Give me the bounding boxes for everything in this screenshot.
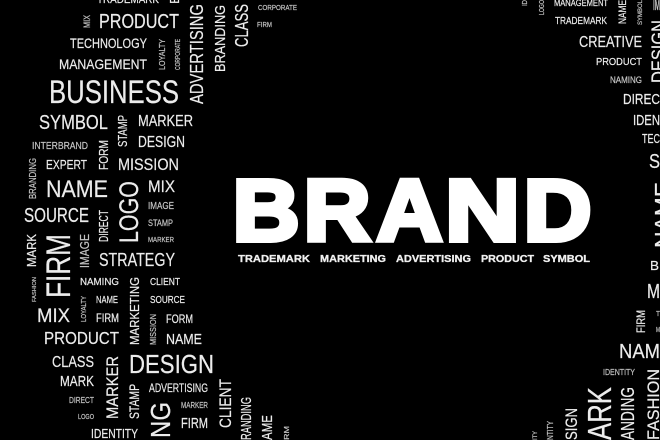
word cloud: left lower block: AME — [260, 415, 276, 440]
word cloud: left upper block: PRODUCT — [99, 11, 179, 33]
heading: BRAND: R — [304, 162, 371, 260]
word cloud: right block: ARK — [581, 387, 618, 440]
tagline: category words — [238, 254, 590, 265]
word cloud: left upper block: LOGO — [114, 181, 144, 243]
word cloud: left upper block — [24, 0, 297, 345]
word cloud: left lower block: RM — [282, 426, 291, 440]
word cloud: right block — [522, 0, 660, 440]
word cloud: left upper block: FASHION — [32, 277, 38, 302]
word cloud: left upper block: CORPORATE — [258, 3, 297, 12]
word cloud: left upper block: DESIGN — [138, 134, 185, 151]
word cloud: left upper block: MISSION — [118, 156, 179, 174]
word cloud: left lower block: MARK — [60, 374, 94, 390]
word cloud: left upper block: IMAGE — [78, 234, 92, 268]
word cloud: right block: FIRM — [636, 310, 648, 333]
tagline: category words: MARKETING — [320, 254, 386, 265]
word cloud: right block: ANDING — [618, 387, 638, 440]
tagline: category words: PRODUCT — [481, 254, 534, 265]
word cloud: left upper block: NAME — [46, 176, 108, 203]
word cloud: right block: PRODUCT — [596, 56, 643, 68]
word cloud: left lower block: RANDING — [239, 397, 255, 440]
word cloud: right block: SIGN — [562, 408, 581, 440]
word cloud: right block: IDENTITY — [603, 367, 635, 377]
word cloud: left lower block: NAME — [166, 332, 202, 348]
word cloud: left lower block: MISSION — [148, 314, 158, 345]
word cloud: left lower block: LOGO — [78, 414, 94, 421]
word cloud: left upper block: MIX — [148, 177, 175, 196]
word cloud: right block: ITY — [533, 431, 539, 440]
heading: BRAND: A — [376, 162, 442, 260]
word cloud: left upper block: MARK — [25, 233, 39, 267]
word cloud: left upper block: IMAGE — [148, 201, 174, 212]
word cloud: right block: NTITY — [545, 421, 555, 440]
heading: BRAND: D — [524, 162, 592, 260]
word cloud: left upper block: FIRM — [40, 234, 78, 298]
word cloud: left lower block: MARKER — [181, 400, 208, 410]
word cloud: left upper block: CORPORATE — [175, 39, 182, 70]
word cloud: left lower block: PRODUCT — [44, 328, 119, 348]
word cloud: left upper block: MANAGEMENT — [59, 56, 147, 72]
word cloud: left upper block: INTERBRAND — [32, 141, 88, 152]
word cloud: left lower block: SOURCE — [150, 295, 185, 306]
heading: BRAND: B — [233, 162, 300, 260]
word cloud: left upper block: MIX — [82, 15, 92, 28]
word cloud: left upper block: FIRM — [257, 20, 272, 29]
word cloud: left upper block: CLIENT — [150, 276, 180, 288]
word cloud: left lower block: FORM — [166, 314, 193, 326]
tagline: category words: SYMBOL — [543, 254, 590, 265]
word cloud: left lower block: ADVERTISING — [149, 383, 208, 395]
word cloud: left lower block: NG — [145, 402, 176, 438]
word cloud: right block: CREATIVE — [579, 34, 642, 51]
word cloud: left upper block: LOYALTY — [157, 39, 167, 70]
word cloud: left upper block: SOURCE — [24, 205, 89, 227]
word cloud: left lower block: FIRM — [96, 313, 119, 325]
word cloud: left upper block: FORM — [97, 140, 111, 170]
word cloud: right block: B — [650, 258, 659, 273]
word cloud: left lower block: FIRM — [181, 416, 208, 432]
word cloud: left upper block: STRATEGY — [99, 249, 175, 270]
word cloud: left lower block: LOYALTY — [79, 296, 88, 322]
word cloud: left lower block: DESIGN — [129, 349, 214, 379]
word cloud: left upper block: NAMING — [80, 276, 119, 288]
word cloud: right block: NAMING — [610, 75, 642, 85]
word cloud: left upper block: STAMP — [116, 115, 130, 147]
word cloud: left lower block: MIX — [37, 306, 70, 327]
word cloud: left lower block: DIRECT — [69, 395, 94, 405]
word cloud: left upper block: TECHNOLOGY — [70, 35, 148, 51]
word cloud: left upper block: BRANDING — [28, 158, 39, 199]
word cloud: left upper block: EXPERT — [46, 157, 87, 172]
word cloud: left lower block: MARKER — [103, 356, 122, 419]
word cloud: left upper block: DIRECT — [97, 210, 111, 242]
heading: BRAND: N — [445, 162, 520, 260]
word cloud: right block: TRADEMARK — [555, 16, 607, 27]
word cloud: left upper block: STAMP — [148, 218, 173, 228]
tagline: category words: TRADEMARK — [238, 254, 311, 265]
word cloud: left lower block: CLIENT — [216, 379, 235, 428]
tagline: category words: ADVERTISING — [396, 254, 471, 265]
word cloud: left upper block: MARKETING — [127, 277, 142, 345]
word cloud: left lower block — [37, 295, 291, 440]
word cloud: left upper block: BUSINESS — [49, 74, 179, 110]
word cloud: left lower block: CLASS — [52, 354, 94, 371]
word cloud: left upper block: SYMBOL — [39, 112, 108, 134]
heading: BRAND — [233, 162, 592, 260]
word cloud: left upper block: MARKER — [148, 235, 174, 244]
word cloud: left lower block: NAME — [96, 295, 118, 306]
word cloud: left lower block: STAMP — [127, 384, 142, 419]
word cloud: left upper block: MARKER — [138, 113, 193, 130]
